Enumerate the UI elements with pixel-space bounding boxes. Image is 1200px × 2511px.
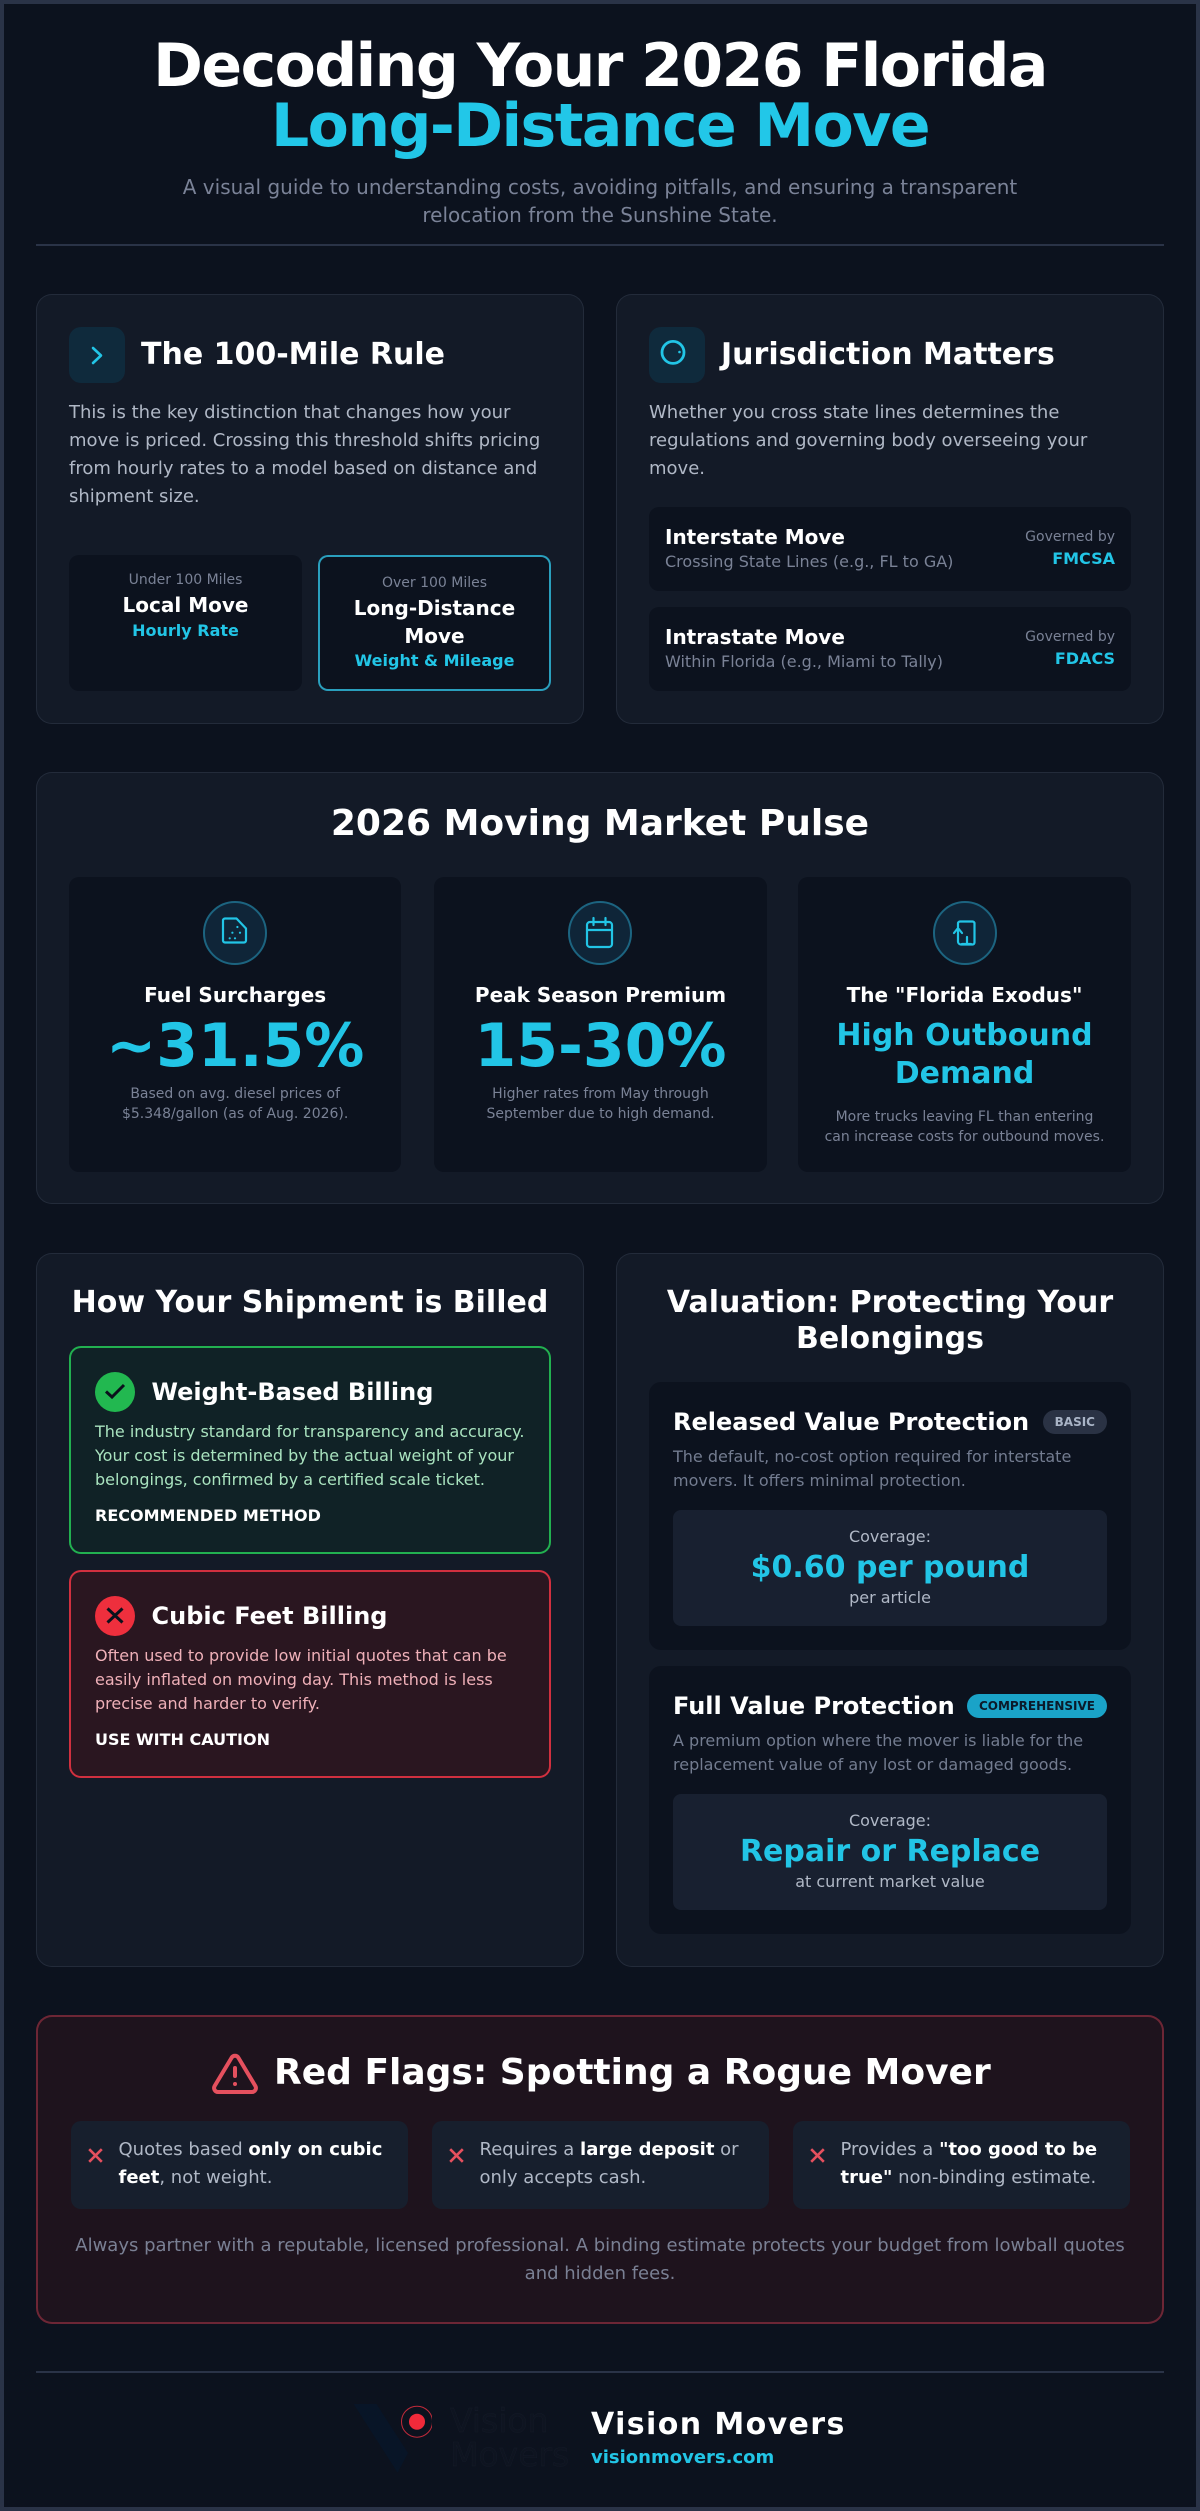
flag 2: [432, 2121, 769, 2209]
stat: florida exodus: Demand: [895, 1056, 1034, 1091]
card: weight-based billing: The industry standard for transparency and accuracy.: [95, 1422, 524, 1441]
card: full value protection: replacement value of any lost or damaged goods.: [673, 1755, 1072, 1774]
card: cubic feet billing: easily inflated on moving day. This method is less: [95, 1670, 493, 1689]
interstate row: Governed by: [1025, 529, 1115, 545]
heading: 2026 Moving Market Pulse: [331, 803, 869, 844]
brand name: Vision Movers: [591, 2407, 846, 2442]
stat: peak season: 15-30%: [474, 1011, 726, 1081]
flag 2: Requires a large deposit or: [480, 2139, 739, 2160]
flag 3: true" non-binding estimate.: [840, 2167, 1096, 2188]
icon: check: [95, 1372, 135, 1412]
stat: peak season: September due to high demand.: [486, 1106, 715, 1122]
local move box: Hourly Rate: [132, 621, 239, 640]
logo: [354, 2401, 569, 2474]
heading: Valuation: Protecting Your: [667, 1285, 1113, 1320]
closing note: [75, 2235, 1125, 2284]
logo wordmark: [450, 2401, 569, 2474]
text block: This is the key distinction that changes how your: [69, 402, 510, 423]
heading: Red Flags: Spotting a Rogue Mover: [274, 2052, 991, 2093]
coverage box: [673, 1510, 1107, 1626]
panel: valuation: [616, 1253, 1164, 1967]
closing note: Always partner with a reputable, licensed professional. A binding estimate protects your budget from lowball quotes: [75, 2235, 1125, 2256]
heading: The 100-Mile Rule: [141, 336, 445, 372]
badge: comprehensive: COMPREHENSIVE: [979, 1699, 1095, 1713]
text block: Whether you cross state lines determines the: [649, 402, 1059, 423]
text block: move is priced. Crossing this threshold shifts pricing: [69, 430, 540, 451]
heading: How Your Shipment is Billed: [72, 1285, 548, 1320]
intrastate row: FDACS: [1055, 649, 1115, 668]
stat: florida exodus: More trucks leaving FL than entering: [836, 1109, 1093, 1125]
icon: x: [810, 2148, 825, 2163]
subtitle: relocation from the Sunshine State.: [422, 203, 778, 227]
panel: the 100-mile rule: [36, 294, 584, 724]
coverage box: at current market value: [795, 1872, 985, 1891]
icon: warning triangle: [212, 2054, 258, 2094]
intrastate row: Governed by: [1025, 629, 1115, 645]
card: weight-based billing: Weight-Based Billing: [152, 1378, 433, 1406]
text block: [649, 402, 1088, 479]
badge: comprehensive: [967, 1694, 1107, 1718]
interstate row: [649, 507, 1131, 591]
card: released value protection: movers. It offers minimal protection.: [673, 1471, 966, 1490]
text block: move.: [649, 458, 705, 479]
stat: florida exodus: [798, 877, 1131, 1172]
icon: chevron: [69, 327, 125, 383]
subtitle: [183, 175, 1017, 227]
intrastate row: Intrastate Move: [665, 625, 845, 649]
card: cubic feet billing: [69, 1570, 551, 1778]
card: weight-based billing: Your cost is determined by the actual weight of your: [95, 1446, 514, 1465]
coverage box: Coverage:: [849, 1527, 931, 1546]
flag 3: Provides a "too good to be: [840, 2139, 1097, 2160]
local move box: Local Move: [123, 593, 248, 617]
icon: fuel document: [203, 901, 267, 965]
closing note: and hidden fees.: [525, 2263, 675, 2284]
flag 1: [71, 2121, 408, 2209]
stat: peak season: Peak Season Premium: [475, 983, 726, 1007]
card: cubic feet billing: precise and harder to verify.: [95, 1694, 320, 1713]
long-distance move box: Weight & Mileage: [355, 651, 514, 670]
flag 1: feet, not weight.: [118, 2167, 272, 2188]
flag 3: [793, 2121, 1130, 2209]
text block: [68, 402, 540, 507]
card: released value protection: [649, 1382, 1131, 1650]
heading: Jurisdiction Matters: [721, 336, 1055, 372]
logo mark: [354, 2404, 432, 2472]
stat: peak season: [434, 877, 767, 1172]
card: released value protection: The default, no-cost option required for interstate: [673, 1447, 1071, 1466]
long-distance move box: Move: [404, 624, 465, 648]
title: Decoding Your 2026 Florida: [153, 31, 1047, 101]
icon: circle: [649, 327, 705, 383]
logo wordmark: Movers: [450, 2435, 569, 2474]
interstate row: FMCSA: [1052, 549, 1115, 568]
long-distance move box: Over 100 Miles: [382, 575, 487, 591]
coverage box: $0.60 per pound: [751, 1550, 1029, 1584]
title: Long-Distance Move: [271, 91, 929, 161]
coverage box: Coverage:: [849, 1811, 931, 1830]
panel: market pulse: [36, 772, 1164, 1204]
local move box: Under 100 Miles: [129, 572, 242, 588]
stat: fuel surcharges: ~31.5%: [106, 1011, 364, 1081]
heading: [667, 1285, 1114, 1356]
card: full value protection: Full Value Protection: [673, 1692, 955, 1720]
panel: how your shipment is billed: [36, 1253, 584, 1967]
stat: florida exodus: The "Florida Exodus": [847, 983, 1082, 1007]
card: released value protection: Released Value Protection: [673, 1408, 1029, 1436]
stat: fuel surcharges: Fuel Surcharges: [144, 983, 326, 1007]
badge: basic: [1043, 1410, 1107, 1434]
stat: florida exodus: High Outbound: [836, 1018, 1093, 1053]
icon: x: [449, 2148, 464, 2163]
card: full value protection: [649, 1666, 1131, 1934]
local move box: [69, 555, 302, 691]
text block: shipment size.: [69, 486, 200, 507]
flag 2: only accepts cash.: [480, 2167, 646, 2188]
card: weight-based billing: belongings, confirmed by a certified scale ticket.: [95, 1470, 485, 1489]
card: weight-based billing: RECOMMENDED METHOD: [95, 1506, 321, 1525]
stat: peak season: Higher rates from May through: [492, 1086, 709, 1102]
icon: cross: [95, 1596, 135, 1636]
coverage box: Repair or Replace: [740, 1834, 1040, 1868]
stat: florida exodus: can increase costs for outbound moves.: [825, 1129, 1104, 1145]
interstate row: Crossing State Lines (e.g., FL to GA): [665, 552, 953, 571]
icon: x: [88, 2148, 103, 2163]
card: cubic feet billing: USE WITH CAUTION: [95, 1730, 270, 1749]
icon: calendar: [568, 901, 632, 965]
website: visionmovers.com: [591, 2447, 774, 2468]
coverage box: per article: [849, 1588, 931, 1607]
subtitle: A visual guide to understanding costs, avoiding pitfalls, and ensuring a transparent: [183, 175, 1017, 199]
title: [153, 31, 1047, 161]
header: [36, 31, 1164, 246]
intrastate row: [649, 607, 1131, 691]
badge: basic: BASIC: [1055, 1415, 1095, 1429]
long-distance move box: Long-Distance: [354, 596, 515, 620]
stat: fuel surcharges: $5.348/gallon (as of Aug. 2026).: [122, 1106, 348, 1122]
stat: fuel surcharges: [69, 877, 401, 1172]
long-distance move box: [318, 555, 551, 691]
text block: regulations and governing body overseeing your: [649, 430, 1087, 451]
intrastate row: Within Florida (e.g., Miami to Tally): [665, 652, 943, 671]
card: cubic feet billing: Cubic Feet Billing: [152, 1602, 387, 1630]
logo wordmark: Vision: [450, 2401, 548, 2440]
flag 1: Quotes based only on cubic: [118, 2139, 382, 2160]
coverage box: [673, 1794, 1107, 1910]
interstate row: Interstate Move: [665, 525, 845, 549]
card: full value protection: A premium option where the mover is liable for the: [673, 1731, 1083, 1750]
heading: Belongings: [796, 1321, 984, 1356]
icon: outbound device: [933, 901, 997, 965]
panel: jurisdiction matters: [616, 294, 1164, 724]
panel: red flags: [36, 2015, 1164, 2324]
card: cubic feet billing: Often used to provide low initial quotes that can be: [95, 1646, 507, 1665]
text block: from hourly rates to a model based on distance and: [69, 458, 537, 479]
stat: fuel surcharges: Based on avg. diesel prices of: [130, 1086, 340, 1102]
card: weight-based billing: [69, 1346, 551, 1554]
footer: [36, 2371, 1164, 2474]
